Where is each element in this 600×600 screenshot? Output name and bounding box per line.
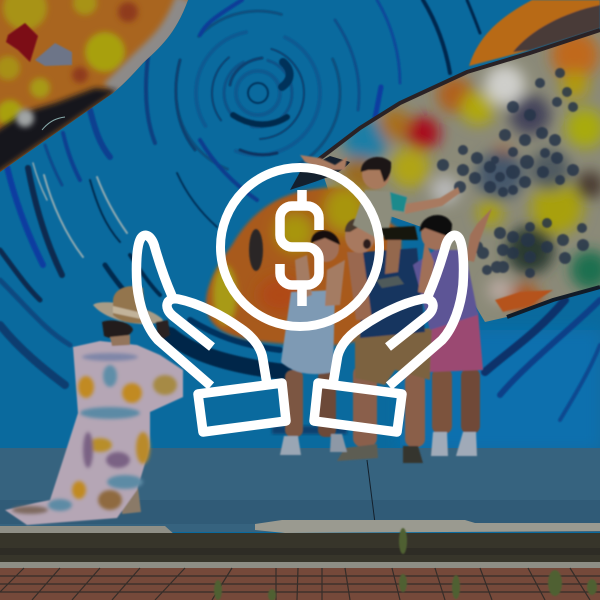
- mural: top-right orange wing: [469, 0, 600, 66]
- photographer woman in tie-dye dress: [5, 286, 183, 525]
- icon: coin circle: [220, 168, 380, 326]
- icon: left hand: [136, 235, 286, 432]
- boy in purple: [413, 208, 492, 456]
- boy on shoulders: [300, 155, 460, 288]
- photo: mural wall background: [0, 0, 600, 450]
- mural: top-left painted shape: [0, 0, 188, 178]
- family group posing: [280, 155, 492, 463]
- mural: central orange-yellow shape: [206, 156, 405, 345]
- mural: right painted shape with dots: [318, 30, 600, 322]
- man: [337, 218, 432, 463]
- photo: pavement and street: [0, 448, 600, 600]
- icon: dollar sign: [280, 190, 319, 306]
- girl: [280, 230, 347, 455]
- icon: right hand: [314, 235, 464, 432]
- icon: hands holding dollar coin: [136, 168, 464, 432]
